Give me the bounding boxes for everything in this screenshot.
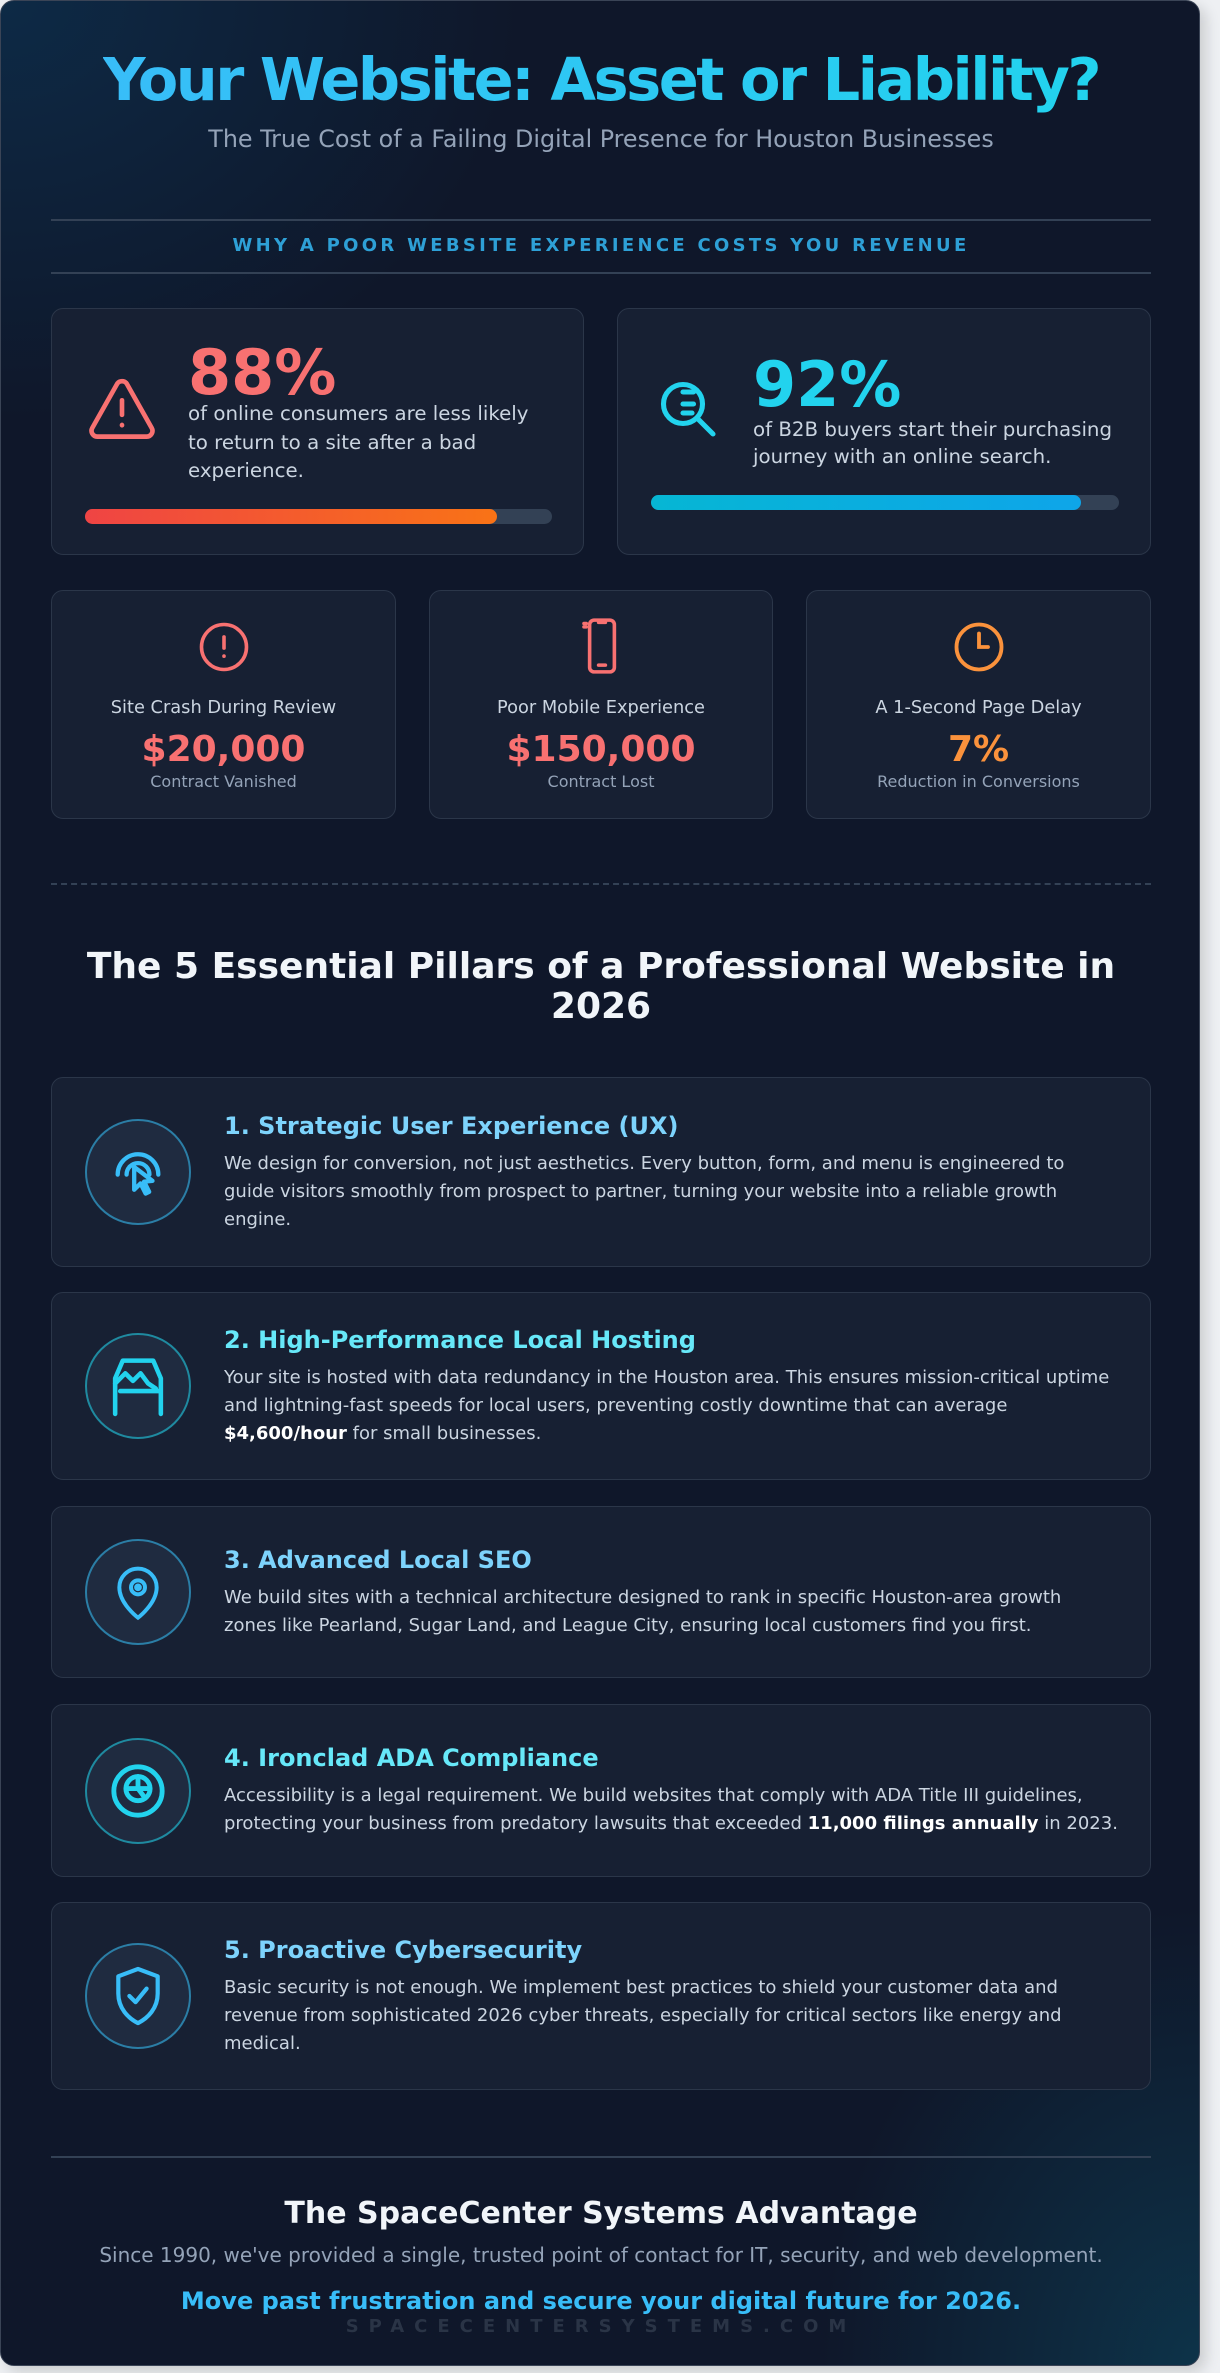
pillar 2: Your site is hosted with data redundancy in the Houston area. This ensures mission-critical uptime and lightning-fast speeds for local users, preventing costly downtime that can average $4,600/hour for small businesses.	[224, 1366, 1109, 1444]
icon: clock	[954, 622, 1004, 672]
cost card: mobile	[429, 590, 773, 819]
pillar 5	[51, 1902, 1151, 2090]
cost card: site crash: Site Crash During Review	[111, 697, 336, 718]
cost card: mobile: $150,000	[506, 729, 696, 770]
cost card: site crash	[51, 590, 396, 819]
pillar 1	[51, 1077, 1151, 1267]
call to action: Move past frustration and secure your digital future for 2026.	[181, 2287, 1021, 2315]
section heading: WHY A POOR WEBSITE EXPERIENCE COSTS YOU REVENUE	[232, 235, 970, 256]
pillar 5: Basic security is not enough. We implement best practices to shield your customer data and revenue from sophisticated 2026 cyber threats, especially for critical sectors like energy and medical.	[224, 1976, 1062, 2054]
stat card: 92%	[617, 308, 1151, 555]
subtitle: The True Cost of a Failing Digital Presence for Houston Businesses	[208, 125, 994, 153]
icon: map pin	[85, 1539, 191, 1645]
icon: search	[660, 382, 716, 436]
pillar 4	[51, 1704, 1151, 1877]
cost card: mobile: Poor Mobile Experience	[497, 697, 705, 718]
pillars heading: The 5 Essential Pillars of a Professional Website in 2026	[87, 946, 1115, 1027]
watermark: SPACECENTERSYSTEMS.COM	[346, 2316, 856, 2337]
pillar 4: Accessibility is a legal requirement. We build websites that comply with ADA Title III guidelines, protecting your business from predatory lawsuits that exceeded 11,000 filings annually in 2023.	[224, 1785, 1118, 1834]
pillar 1: 1. Strategic User Experience (UX)	[224, 1112, 678, 1140]
icon: alert circle	[200, 622, 248, 672]
pillar 3: 3. Advanced Local SEO	[224, 1546, 532, 1574]
stat description: of online consumers are less likely to return to a site after a bad experience.	[188, 402, 528, 482]
pillar 5: 5. Proactive Cybersecurity	[224, 1936, 582, 1964]
icon: phone	[582, 618, 616, 674]
stat number: 88%	[188, 336, 336, 409]
cost card: page delay: 7%	[948, 729, 1009, 770]
stat description: of B2B buyers start their purchasing journey with an online search.	[753, 418, 1112, 468]
footer text: Since 1990, we've provided a single, trusted point of contact for IT, security, and web development.	[99, 2243, 1103, 2267]
progress bar	[651, 495, 1119, 510]
title: Your Website: Asset or Liability?	[103, 45, 1099, 114]
pillar 3: We build sites with a technical architecture designed to rank in specific Houston-area growth	[224, 1586, 1061, 1608]
cost card: site crash: $20,000	[142, 729, 305, 770]
pillar 2	[51, 1292, 1151, 1480]
icon: hosting	[85, 1333, 191, 1439]
cost card: page delay: Reduction in Conversions	[877, 772, 1080, 791]
pillar 3: zones like Pearland, Sugar Land, and League City, ensuring local customers find you first.	[224, 1614, 1032, 1636]
icon: warning triangle	[89, 378, 155, 439]
pillar 3	[51, 1506, 1151, 1678]
pillar 1: We design for conversion, not just aesthetics. Every button, form, and menu is engineered to guide visitors smoothly from prospect to partner, turning your website into a reliable growth engine.	[224, 1152, 1064, 1230]
pillar 4: 4. Ironclad ADA Compliance	[224, 1744, 599, 1772]
cost card: site crash: Contract Vanished	[150, 772, 297, 791]
pillar 2: 2. High-Performance Local Hosting	[224, 1326, 696, 1354]
cost card: page delay	[806, 590, 1151, 819]
progress bar	[85, 509, 552, 524]
icon: accessibility	[85, 1738, 191, 1844]
cost card: mobile: Contract Lost	[548, 772, 654, 791]
icon: shield	[85, 1943, 191, 2049]
stat number: 92%	[753, 348, 901, 421]
stat card: 88%	[51, 308, 584, 555]
footer heading: The SpaceCenter Systems Advantage	[284, 2196, 918, 2231]
cost card: page delay: A 1-Second Page Delay	[875, 697, 1082, 718]
icon: pointer	[85, 1119, 191, 1225]
